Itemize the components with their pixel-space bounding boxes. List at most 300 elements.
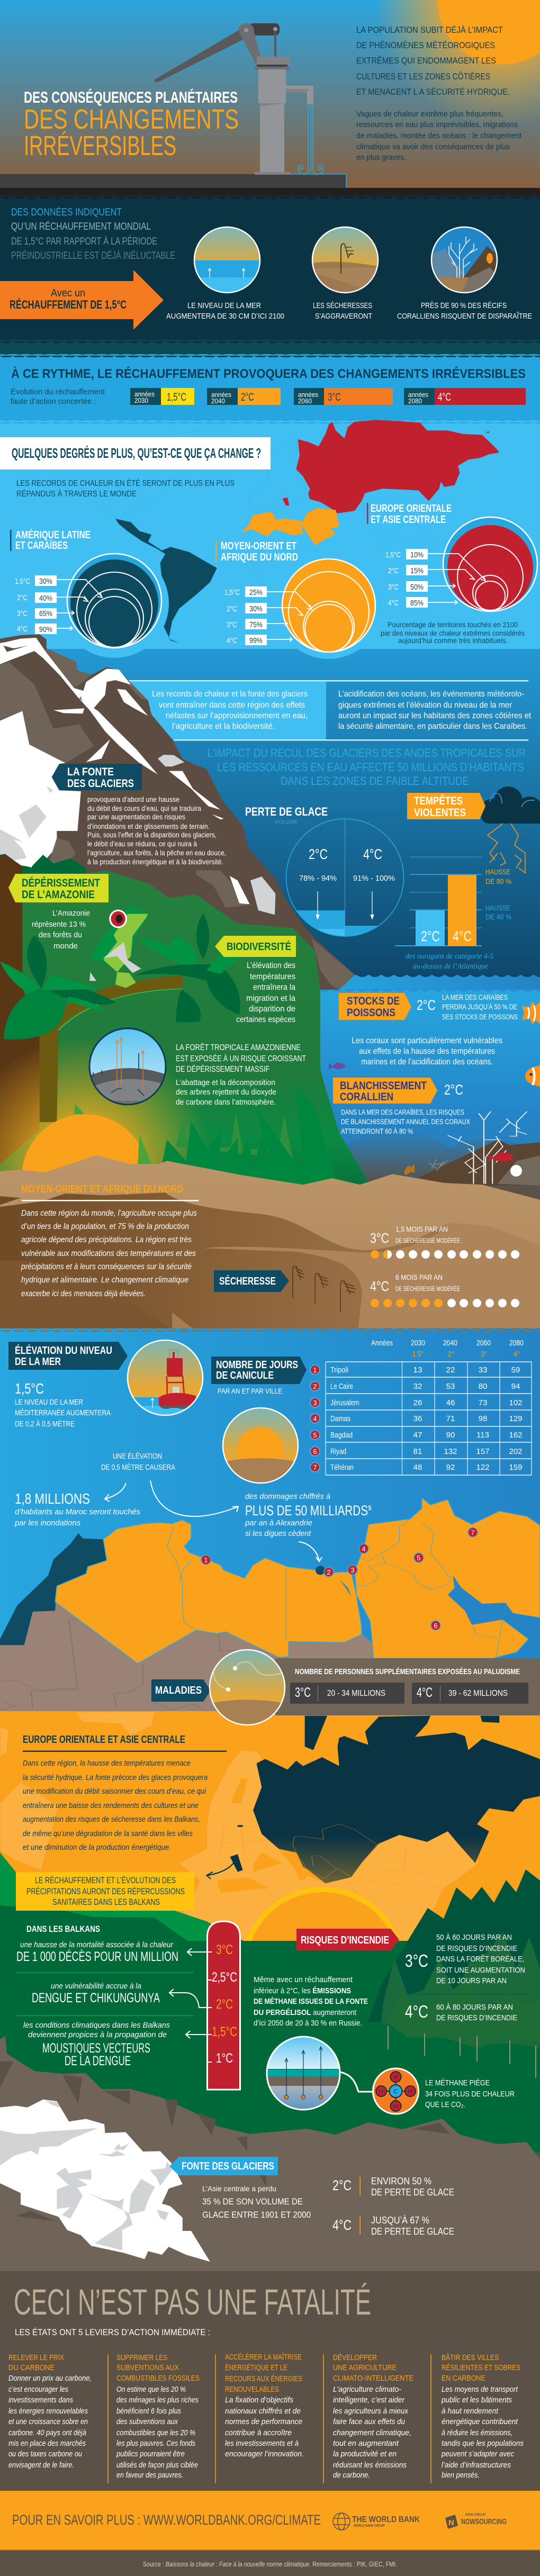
- lever 4: climate-smart agriculture: CLIMATO-INTELLIGENTE: [333, 2374, 413, 2383]
- stat: malaria 3 degrees: 20 - 34 MILLIONS: [327, 1689, 385, 1698]
- chart: Eastern Europe and Central Asia: 2°C: [388, 566, 399, 575]
- timeline 2080: 4°C: [438, 391, 451, 403]
- icon: water pump: [154, 23, 313, 175]
- text: biodiversity: certaines espèces: [236, 1015, 295, 1024]
- logo: World Bank: THE WORLD BANK: [352, 2515, 420, 2524]
- icon: methane molecule: [373, 2068, 418, 2114]
- panel: Andes text: Les records de chaleur et la fonte des glaciers: [152, 690, 308, 699]
- chart: ice loss: 91% - 100%: [353, 874, 395, 883]
- panel: Andes text: [127, 680, 532, 788]
- timeline 2030: années: [134, 390, 155, 398]
- label: violent storms: [407, 793, 485, 819]
- lever 3: energy efficiency: normes de performance: [225, 2417, 302, 2426]
- icon: thermometer: 2,5°C: [212, 1970, 237, 1985]
- label: biodiversity: [215, 936, 296, 957]
- impact captions: AUGMENTERA DE 30 CM D’ICI 2100: [166, 312, 284, 321]
- chart: violent storms: 4°C: [453, 928, 472, 944]
- text: Middle East: exacerbe ici des menaces déjà élevées.: [21, 1289, 146, 1298]
- text: fire 3 degrees: DANS LA FORÊT BORÉALE,: [436, 1955, 524, 1964]
- text: fire 3 degrees: DE RISQUES D’INCENDIE: [436, 1944, 517, 1953]
- lever 4: climate-smart agriculture: tout en augmentant: [333, 2439, 399, 2448]
- lever 1: carbon price: RELEVER LE PRIX: [8, 2353, 64, 2362]
- text: Eastern Europe: Dans cette région, la hausse des températures menace: [23, 1759, 191, 1768]
- text: Balkans: DANS LES BALKANS: [26, 1924, 100, 1934]
- heading: Andes glaciers: DANS LES ZONES DE FAIBLE ALTITUDE: [281, 774, 469, 788]
- intro text: climatique va avoir des conséquences de plus: [356, 143, 510, 151]
- text: Balkans: MOUSTIQUES VECTEURS: [42, 2041, 150, 2056]
- table: heat days per city: 113: [476, 1431, 489, 1440]
- icon: thermometer: 1,5°C: [212, 2024, 237, 2039]
- data statement: QU’UN RÉCHAUFFEMENT MONDIAL: [11, 221, 151, 232]
- map caption: aujourd’hui comme très inhabituels.: [398, 636, 508, 645]
- lever 4: climate-smart agriculture: changement climatique,: [333, 2428, 411, 2437]
- timeline 2080: 2080: [408, 397, 422, 405]
- chart: Latin America: 1,5°C: [15, 577, 30, 586]
- label: fire risk: [296, 1929, 399, 1950]
- stat: malaria 4 degrees: 39 - 62 MILLIONS: [448, 1689, 508, 1698]
- timeline 2080: [404, 388, 526, 405]
- chart: violent storms: 2°C: [421, 928, 440, 944]
- table: heat days per city: 73: [479, 1398, 487, 1407]
- text: Morocco flooding: d’habitants au Maroc seront touchés: [15, 1507, 140, 1516]
- text: sea level: UNE ÉLÉVATION: [113, 1452, 162, 1461]
- lever 2: fossil subsidies: en faveur des pauvres.: [116, 2471, 183, 2480]
- table: heat days per city: 2°: [448, 1350, 454, 1359]
- label: heat days: [211, 1357, 307, 1395]
- lever 2: fossil subsidies: COMBUSTIBLES FOSSILES: [116, 2374, 200, 2383]
- chart: Middle East and North Africa: 4°C: [227, 636, 237, 645]
- label: glacier melt: [52, 764, 142, 790]
- chart: Latin America: 3°C: [17, 609, 28, 618]
- label: coral bleaching: BLANCHISSEMENT: [340, 1080, 427, 1092]
- icon: orange fish: [404, 1164, 415, 1175]
- text: fire 3 degrees: SOIT UNE AUGMENTATION: [436, 1966, 525, 1975]
- text: Middle East: agricole dépend des précipitations. La région est très: [21, 1235, 192, 1244]
- text: Alexandria damages: si les digues cèdent: [245, 1529, 311, 1538]
- table: heat days per city: Damas: [330, 1414, 350, 1423]
- panel: Andes text: néfastes sur l’approvisionnement en eau,: [166, 711, 308, 720]
- hero section: [0, 0, 540, 188]
- map caption: [381, 620, 525, 645]
- impact captions: [166, 301, 532, 321]
- title: IRRÉVERSIBLES: [24, 131, 176, 161]
- lever 1: carbon price: envisagent de le faire.: [8, 2461, 74, 2470]
- text: methane: [425, 2078, 515, 2109]
- drought 4 degrees: [370, 1273, 519, 1307]
- panel: Andes text: vont entraîner dans cette région des effets: [159, 701, 305, 710]
- text: Amazon share: réprésente 13 %: [32, 920, 86, 929]
- lever 3: energy efficiency: ÉNERGÉTIQUE ET LE: [225, 2363, 287, 2372]
- text: Amazon share: [32, 909, 90, 951]
- lever 4: climate-smart agriculture: la productivité et en: [333, 2450, 397, 2459]
- sun glow: [0, 1027, 217, 1186]
- table: heat days per city: 157: [476, 1447, 490, 1456]
- lever 3: energy efficiency: contribue à accroître: [225, 2428, 292, 2437]
- text: forest dieback: [176, 1043, 306, 1107]
- chart: violent storms: des ouragans de catégorie 4-5: [406, 952, 493, 961]
- text: Balkans: une hausse de la mortalité associée à la chaleur: [20, 1940, 174, 1949]
- label: violent storms: TEMPÊTES: [414, 794, 463, 807]
- chart: violent storms: HAUSSE: [485, 903, 510, 912]
- text: Central Asia ice: 35 % DE SON VOLUME DE: [202, 2197, 303, 2207]
- lever 4: climate-smart agriculture: intelligente, c’est aider: [333, 2396, 405, 2405]
- chart: Latin America: 2°C: [17, 593, 28, 602]
- logo: NowSourcing: DEVELOPED BY: [465, 2514, 486, 2517]
- table: heat days per city: Le Caire: [330, 1382, 353, 1391]
- table: heat days per city: Téhéran: [330, 1463, 354, 1472]
- table: heat days per city: 33: [479, 1366, 487, 1375]
- icon: sea urchin: [510, 1165, 522, 1177]
- intro text: LA POPULATION SUBIT DÉJÀ L’IMPACT: [356, 25, 503, 35]
- text: permafrost: inférieur à 2°C, les ÉMISSIONS: [254, 1986, 351, 1995]
- lever 2: fossil subsidies: combustibles que les 20 %: [116, 2428, 195, 2437]
- panel: world map: [0, 420, 540, 988]
- text: Balkans: DE 1 000 DÉCÈS POUR UN MILLION: [16, 1949, 178, 1964]
- table: heat days per city: 71: [446, 1414, 455, 1423]
- panel: stocks and coral text: aux effets de la hausse des températures: [359, 1047, 495, 1056]
- stat: 4 degrees ice loss: DE PERTE DE GLACE: [371, 2226, 454, 2237]
- text: Eastern Europe: entraînera une baisse des rendements des cultures et une: [23, 1801, 199, 1810]
- leaves: [0, 913, 240, 1040]
- text: forest dieback: de carbone dans l’atmosphère.: [176, 1098, 276, 1107]
- lever 3: energy efficiency: ACCÉLÉRER LA MAÎTRISE: [225, 2353, 302, 2362]
- chart: violent storms: DE 40 %: [485, 912, 511, 921]
- lever 1: carbon price: Donner un prix au carbone,: [8, 2374, 92, 2383]
- map: Balkans: [230, 1854, 243, 1872]
- icon: purple fish: [329, 1063, 346, 1070]
- chart: Latin America: 4°C: [17, 625, 28, 634]
- table: heat days per city: 7: [313, 1463, 317, 1471]
- text: sea level: [15, 1380, 175, 1472]
- lever 1: carbon price: mis en place des marchés: [8, 2439, 86, 2448]
- text: permafrost: d’ici 2050 de 20 à 30 % en Russie.: [254, 2019, 362, 2028]
- map: Russia: [253, 1716, 540, 1883]
- icon: forest carbon: [89, 1028, 166, 1106]
- panel: call to action: [0, 2271, 540, 2576]
- text: glacier melt: par une augmentation des risques: [87, 813, 185, 821]
- lever 5: resilient cities: BÂTIR DES VILLES: [442, 2353, 499, 2362]
- table: heat days per city: Tripoli: [330, 1366, 348, 1375]
- icon: red fish: [489, 1153, 513, 1162]
- text: glacier melt: d’inondations et de glissements de terrain.: [87, 822, 210, 830]
- stat: malaria 3 degrees: [290, 1683, 404, 1704]
- lever 3: energy efficiency: RENOUVELABLES: [225, 2385, 279, 2394]
- timeline 2080: années: [408, 391, 428, 399]
- yellow banner: SANITAIRES DANS LES BALKANS: [52, 1897, 160, 1907]
- table: heat days per city: 48: [413, 1463, 422, 1472]
- faint world outlines: [52, 420, 517, 621]
- footer band: [0, 2491, 540, 2550]
- lever 3: energy efficiency: RECOURS AUX ÉNERGIES: [225, 2374, 302, 2383]
- text: fire 3 degrees: 3°C: [405, 1951, 428, 1971]
- text: forest dieback: EST EXPOSÉE À UN RISQUE CROISSANT: [176, 1054, 306, 1063]
- chart: Eastern Europe and Central Asia: 15%: [410, 566, 424, 575]
- table: heat days per city: Riyad: [330, 1447, 346, 1456]
- icon: methane molecule: H: [408, 2089, 412, 2095]
- label: heat days: DE CANICULE: [216, 1370, 274, 1381]
- panel: Central Asia glaciers: [0, 2036, 540, 2272]
- drought 4 degrees: 6 MOIS PAR AN: [395, 1273, 443, 1281]
- lever 3: energy efficiency: encourager l’innovation.: [225, 2450, 304, 2459]
- map markers: 6: [434, 1622, 438, 1630]
- chart: Middle East and North Africa: AFRIQUE DU NORD: [221, 552, 298, 563]
- intro text: CULTURES ET LES ZONES CÔTIÈRES: [356, 71, 490, 82]
- chart: violent storms: DE 80 %: [485, 877, 511, 885]
- chart: ice loss: VOLUME: [275, 819, 298, 825]
- text: permafrost: [254, 1975, 368, 2028]
- text: Eastern Europe: [23, 1759, 208, 1852]
- lever 3: energy efficiency: les investissements et à: [225, 2439, 299, 2448]
- table: heat days per city: 92: [446, 1463, 455, 1472]
- intro text: EXTRÊMES QUI ENDOMMAGENT LES: [356, 56, 496, 66]
- icon: methane molecule: C: [394, 2089, 398, 2095]
- yellow banner: PRÉCIPITATIONS AURONT DES RÉPERCUSSIONS: [26, 1886, 185, 1896]
- label: drought: SÉCHERESSE: [219, 1275, 276, 1287]
- text: Amazon share: monde: [53, 942, 78, 951]
- chart: ice loss: 78% - 94%: [299, 874, 337, 883]
- text: forest dieback: des arbres rejettent du dioxyde: [176, 1088, 276, 1097]
- icon: dry palms: [293, 1266, 356, 1313]
- map: North Africa and Middle East: [0, 1490, 540, 1711]
- map intro text: LES RECORDS DE CHALEUR EN ÉTÉ SERONT DE PLUS EN PLUS: [16, 479, 235, 488]
- icon: clownfish 2: [525, 1065, 540, 1087]
- map intro text: [16, 479, 235, 499]
- arrow: warming: Avec un: [51, 287, 85, 299]
- text: Middle East: précipitations et à leurs conséquences sur la sécurité: [21, 1262, 192, 1271]
- stat: 4 degrees ice loss: JUSQU’À 67 %: [371, 2215, 429, 2226]
- title: DES CONSÉQUENCES PLANÉTAIRES: [24, 88, 238, 106]
- impact captions: LES SÉCHERESSES: [313, 301, 372, 310]
- text: sea level: LE NIVEAU DE LA MER: [15, 1398, 83, 1407]
- icon: buoy: [128, 1340, 203, 1417]
- table: heat days per city: 26: [413, 1398, 422, 1407]
- text: biodiversity: températures: [250, 972, 295, 981]
- text: Middle East: hydrique et alimentaire. Le changement climatique: [21, 1276, 188, 1285]
- chart: Eastern Europe and Central Asia: 3°C: [388, 583, 399, 592]
- timeline caption: [11, 387, 105, 406]
- label: heat days: NOMBRE DE JOURS: [216, 1359, 298, 1371]
- lever 4: climate-smart agriculture: UNE AGRICULTURE: [333, 2363, 397, 2372]
- table: heat days per city: 102: [509, 1398, 523, 1407]
- panel: stocks and coral text: DE BLANCHISSEMENT ANNUEL DES CORAUX: [341, 1118, 470, 1126]
- label: Amazon dieback: [8, 874, 109, 902]
- lever 1: carbon price: DU CARBONE: [8, 2363, 55, 2372]
- heading banner: QUELQUES DEGRÉS DE PLUS, QU’EST-CE QUE ÇA CHANGE ?: [12, 445, 261, 461]
- lever 5: resilient cities: l’aide d’infrastructures: [442, 2461, 511, 2470]
- label: sea level rise: ÉLÉVATION DU NIVEAU: [15, 1344, 112, 1357]
- table: heat days per city: Années: [371, 1339, 393, 1348]
- label: glacier melt: LA FONTE: [67, 766, 114, 778]
- panel: malaria: [151, 1650, 540, 1725]
- chart: ice loss: PERTE DE GLACE: [245, 805, 328, 818]
- sand dunes: [0, 1155, 540, 1328]
- text: glacier melt: du débit des cours d’eau, qui se traduira: [87, 805, 201, 812]
- icon: thermometer: 1°C: [216, 2051, 233, 2066]
- text: methane: QUE LE CO₂.: [425, 2100, 465, 2109]
- table: heat days per city: 53: [446, 1382, 455, 1391]
- icon: permafrost methane: [267, 2036, 373, 2111]
- map markers: 1: [204, 1556, 208, 1564]
- text: glacier melt: à la production énergétique et à la biodiversité.: [87, 858, 223, 866]
- text: fire 4 degrees: 4°C: [405, 2002, 428, 2021]
- green hill: [0, 1852, 540, 2153]
- chart: Middle East and North Africa: 75%: [249, 620, 263, 629]
- lever 5: resilient cities: public et les bâtiments: [441, 2396, 512, 2405]
- stat: 2 degrees ice loss: 2°C: [332, 2177, 352, 2193]
- lever 2: fossil subsidies: On estime que les 20 %: [116, 2385, 186, 2394]
- panel: Andes text: l’agriculture et la biodiversité.: [172, 722, 275, 731]
- map markers: 5: [417, 1554, 421, 1562]
- timeline caption: faute d’action concertée :: [11, 397, 96, 406]
- text: Morocco flooding: par les inondations: [14, 1519, 80, 1527]
- label: coral bleaching: [333, 1078, 437, 1104]
- chart: Eastern Europe and Central Asia: 4°C: [388, 599, 399, 608]
- lever 2: fossil subsidies: [116, 2353, 200, 2480]
- text: glacier melt: [87, 796, 226, 866]
- lever 4: climate-smart agriculture: les agriculteurs à mieux: [333, 2407, 408, 2416]
- lever 5: resilient cities: [441, 2353, 524, 2480]
- chart: Latin America: 40%: [39, 594, 52, 603]
- table: heat days per city: 4: [313, 1415, 317, 1423]
- link: POUR EN SAVOIR PLUS : WWW.WORLDBANK.ORG/CLIMATE: [12, 2512, 321, 2528]
- table: heat days per city: 94: [511, 1382, 520, 1391]
- stat: 4 degrees ice loss: 4°C: [332, 2217, 352, 2233]
- lever 1: carbon price: les énergies renouvelables: [8, 2407, 88, 2416]
- chart: Middle East and North Africa: MOYEN-ORIENT ET: [221, 540, 296, 552]
- illustration: snowy mountain: [0, 2036, 540, 2272]
- map markers: 2: [327, 1568, 331, 1576]
- lever 5: resilient cities: tandis que les populations: [442, 2439, 524, 2448]
- drought 3 degrees: [370, 1225, 519, 1259]
- intro text: [356, 25, 521, 162]
- text: Balkans: [16, 1924, 194, 2068]
- lever 1: carbon price: ou des taxes carbone ou: [8, 2450, 83, 2459]
- text: Alexandria damages: [245, 1492, 372, 1538]
- timeline 2040: années: [211, 391, 231, 399]
- label: drought: [214, 1270, 289, 1292]
- panel: Middle East and North Africa: [0, 1155, 540, 1328]
- map intro text: RÉPANDUS À TRAVERS LE MONDE: [16, 490, 137, 499]
- text: permafrost: DE MÉTHANE ISSUES DE LA FONTE: [254, 1997, 368, 2006]
- text: glacier melt: le débit d’eau se réduira, ce qui nuira à: [87, 840, 197, 848]
- chart: ice loss: 2°C: [309, 846, 328, 862]
- icon: sea level: [194, 227, 260, 295]
- label: coral bleaching: CORALLIEN: [340, 1091, 393, 1103]
- yellow banner: LE RÉCHAUFFEMENT ET L’ÉVOLUTION DES: [35, 1875, 176, 1885]
- table: heat days per city: 1: [313, 1366, 317, 1374]
- chart: Middle East and North Africa: 30%: [249, 604, 263, 613]
- table: heat days per city: 129: [509, 1414, 523, 1423]
- lever 2: fossil subsidies: publics pourraient être: [116, 2450, 185, 2459]
- label: fish stocks: [339, 993, 411, 1020]
- table: heat days per city: 98: [479, 1414, 487, 1423]
- map: Middle East and North Africa: [241, 508, 339, 545]
- label: fish stocks: POISSONS: [347, 1007, 395, 1019]
- logo: World Bank: WORLD BANK GROUP: [354, 2524, 385, 2528]
- label: glacier melt: FONTE DES GLACIERS: [182, 2161, 274, 2172]
- panel: stocks and coral text: marines et de l’acidification des océans.: [361, 1057, 493, 1066]
- lever 2: fossil subsidies: utilisés de façon plus ciblée: [116, 2461, 198, 2470]
- label: Amazon dieback: DE L’AMAZONIE: [22, 889, 95, 901]
- label: diseases: MALADIES: [155, 1685, 202, 1696]
- text: biodiversity: [236, 961, 295, 1024]
- impact captions: LE NIVEAU DE LA MER: [187, 301, 261, 310]
- panel: warming timeline: [0, 340, 540, 420]
- logo: NowSourcing: NOWSOURCING: [461, 2517, 507, 2526]
- text: Middle East: Dans cette région du monde, l’agriculture occupe plus: [21, 1209, 197, 1218]
- label: glacier melt: [169, 2157, 278, 2175]
- chart: Latin America: AMÉRIQUE LATINE: [15, 529, 91, 541]
- panel: stocks and coral text: DANS LA MER DES CARAÏBES, LES RISQUES: [341, 1108, 464, 1116]
- ground slab: [0, 174, 346, 188]
- logo: NowSourcing: N: [448, 2518, 454, 2527]
- arrow: warming: RÉCHAUFFEMENT DE 1,5°C: [10, 298, 127, 311]
- panel: sea level and heat days: [0, 1328, 540, 1667]
- data statement: DES DONNÉES INDIQUENT: [11, 207, 122, 218]
- timeline caption: Évolution du réchauffement: [11, 387, 105, 396]
- icon: frog: [89, 905, 148, 988]
- icon: drought: [312, 227, 378, 293]
- label: sea level rise: [8, 1342, 128, 1370]
- text: forest dieback: LA FORÊT TROPICALE AMAZONIENNE: [176, 1043, 301, 1052]
- icon: thermometer: [208, 1921, 240, 2090]
- chart: Middle East and North Africa: 1,5°C: [224, 588, 240, 597]
- text: biodiversity: L’élévation des: [247, 961, 295, 970]
- icon: pale coral: [429, 1159, 447, 1171]
- chart: Middle East and North Africa: 25%: [249, 588, 263, 597]
- lever 1: carbon price: et une croissance sobre en: [8, 2417, 88, 2426]
- text: permafrost: Même avec un réchauffement: [254, 1975, 353, 1984]
- timeline 2040: [207, 388, 281, 405]
- text: Alexandria damages: PLUS DE 50 MILLIARDS: [245, 1503, 368, 1519]
- lever 5: resilient cities: à réduire les émissions,: [442, 2428, 512, 2437]
- text: Eastern Europe: la sécurité hydrique. La fonte précoce des glaces provoquera: [23, 1773, 208, 1782]
- map markers: 4: [362, 1545, 366, 1553]
- text: biodiversity: migration et la: [246, 994, 295, 1003]
- map caption: Pourcentage de territoires touchés en 2100: [388, 620, 518, 629]
- lever 4: climate-smart agriculture: DÉVELOPPER: [333, 2353, 377, 2362]
- chart: Middle East and North Africa: [215, 540, 382, 659]
- label: violent storms: VIOLENTES: [414, 807, 466, 819]
- timeline 2030: 1,5°C: [167, 391, 186, 403]
- impact captions: PRÈS DE 90 % DES RÉCIFS: [421, 301, 507, 310]
- intro text: ressources en eau plus imprévisibles, migrations: [356, 121, 518, 129]
- icon: methane molecule: H: [394, 2103, 398, 2110]
- chart: Eastern Europe and Central Asia: 1,5°C: [385, 550, 401, 559]
- lever 2: fossil subsidies: des ménages les plus riches: [116, 2396, 199, 2405]
- intro text: DE PHÉNOMÈNES MÉTÉOROGIQUES: [356, 40, 495, 50]
- panel: stocks and coral text: [329, 993, 540, 1184]
- source note: Source : Baissons la chaleur : Face à la nouvelle norme climatique. Remerciements : PIK, GIEC, FMI.: [143, 2560, 397, 2568]
- chart: Latin America: 90%: [39, 625, 52, 634]
- text: glacier melt: provoquera d’abord une hausse: [87, 796, 179, 803]
- table: heat days per city: 90: [446, 1431, 455, 1440]
- table: heat days per city: 2060: [476, 1339, 491, 1348]
- water stream: [290, 104, 346, 188]
- panel: stocks and coral text: ATTEINDRONT 60 À 80 %: [341, 1127, 413, 1135]
- text: Morocco flooding: 1,8 MILLIONS: [15, 1490, 90, 1507]
- chart: violent storms: HAUSSE: [485, 867, 510, 876]
- text: Balkans: DE LA DENGUE: [65, 2054, 131, 2068]
- text: biodiversity: entraînera la: [253, 983, 295, 992]
- impact captions: S’AGGRAVERONT: [315, 312, 372, 321]
- text: Balkans: une vulnérabilité accrue à la: [51, 1982, 141, 1991]
- lever 1: carbon price: carbone. 40 pays ont déjà: [8, 2428, 86, 2437]
- stat: 2 degrees ice loss: ENVIRON 50 %: [371, 2176, 431, 2186]
- arrows: thermometer: [169, 1948, 210, 2038]
- chart: Middle East and North Africa: 3°C: [227, 620, 237, 629]
- lever 2: fossil subsidies: des subventions aux: [116, 2417, 178, 2426]
